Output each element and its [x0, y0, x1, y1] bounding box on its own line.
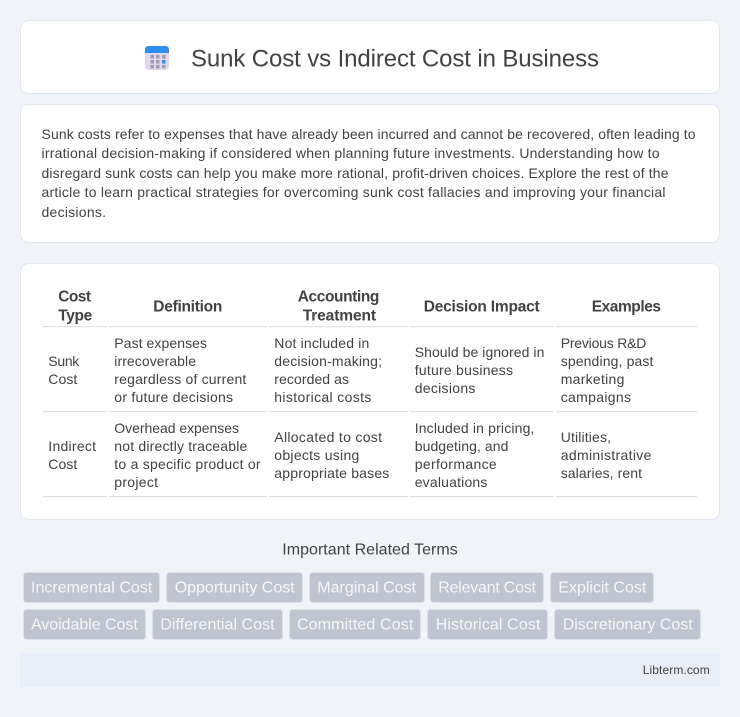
row: sunk cost: historical costs [274, 389, 371, 405]
row: sunk cost: recorded as [274, 371, 349, 387]
related terms tags: Differential Cost [160, 616, 275, 634]
related terms tags: Historical Cost [436, 616, 541, 634]
row: indirect cost: appropriate bases [274, 465, 389, 481]
intro text panel: Sunk costs refer to expenses that have already been incurred and cannot be recovered, often leading to [42, 126, 696, 142]
row: indirect cost: objects using [274, 447, 359, 463]
intro text panel: disregard sunk costs can help you make more rational, profit-driven choices. Explore the rest of the [42, 165, 669, 181]
row: sunk cost: Previous R&D [561, 335, 646, 351]
row: sunk cost: decisions [415, 380, 475, 396]
intro text panel [20, 104, 720, 242]
row: indirect cost: to a specific product or [114, 456, 261, 472]
related terms tags: Incremental Cost [31, 580, 153, 596]
row: sunk cost [48, 335, 654, 405]
intro text panel: article to learn practical strategies for overcoming sunk cost fallacies and improving your financial [42, 184, 666, 200]
row: indirect cost: Indirect [48, 438, 96, 454]
icon: calendar [145, 46, 169, 70]
intro text panel: decisions. [42, 204, 106, 220]
row: indirect cost: Overhead expenses [114, 420, 239, 436]
related terms tags: Committed Cost [297, 616, 414, 634]
row: sunk cost: Should be ignored in [415, 344, 544, 360]
table header: Type [58, 308, 93, 324]
title card [20, 20, 720, 94]
row: indirect cost: budgeting, and [415, 438, 508, 454]
intro text panel: irrational decision-making if considered when planning future investments. Understanding how to [42, 145, 660, 161]
row: indirect cost: performance [415, 456, 497, 472]
row: indirect cost [48, 420, 652, 490]
table header: Treatment [303, 308, 376, 324]
row: indirect cost: Utilities, [561, 429, 611, 445]
row: sunk cost: campaigns [561, 389, 631, 405]
table header: Decision Impact [424, 298, 540, 316]
row: sunk cost: decision-making; [274, 353, 382, 369]
row: sunk cost: irrecoverable [114, 353, 196, 369]
row: sunk cost: or future decisions [114, 389, 233, 405]
row: sunk cost: Not included in [274, 335, 369, 351]
row: indirect cost: administrative [561, 447, 652, 463]
row: sunk cost: Sunk [48, 353, 80, 369]
row: sunk cost: regardless of current [114, 371, 246, 387]
row: indirect cost: project [114, 474, 158, 490]
row: sunk cost: Past expenses [114, 335, 207, 351]
related terms tags: Relevant Cost [438, 580, 537, 596]
row: sunk cost: future business [415, 362, 513, 378]
title: Sunk Cost vs Indirect Cost in Business [191, 46, 599, 72]
row: sunk cost: spending, past [561, 353, 654, 369]
comparison table panel [20, 264, 720, 520]
table header: Accounting [298, 288, 379, 306]
row: indirect cost: not directly traceable [114, 438, 248, 454]
footer bar [20, 653, 720, 687]
row: sunk cost: Cost [48, 371, 77, 387]
related terms tags: Explicit Cost [558, 580, 647, 596]
row: indirect cost: Cost [48, 456, 77, 472]
related terms heading: Important Related Terms [282, 542, 458, 558]
related terms tags [24, 572, 700, 640]
row: indirect cost: Allocated to cost [274, 429, 382, 445]
related terms tags: Opportunity Cost [175, 580, 295, 596]
row: indirect cost: salaries, rent [561, 465, 642, 481]
row: sunk cost: marketing [561, 371, 624, 387]
row: indirect cost: Included in pricing, [415, 420, 534, 436]
table header: Cost [58, 288, 91, 306]
row: indirect cost: evaluations [415, 474, 487, 490]
related terms tags: Discretionary Cost [563, 616, 693, 634]
related terms tags: Avoidable Cost [31, 616, 138, 634]
table header: Examples [592, 298, 661, 316]
table header: Definition [153, 298, 222, 316]
footer source: Libterm.com [643, 663, 710, 677]
table header [58, 288, 661, 324]
related terms tags: Marginal Cost [317, 580, 417, 596]
